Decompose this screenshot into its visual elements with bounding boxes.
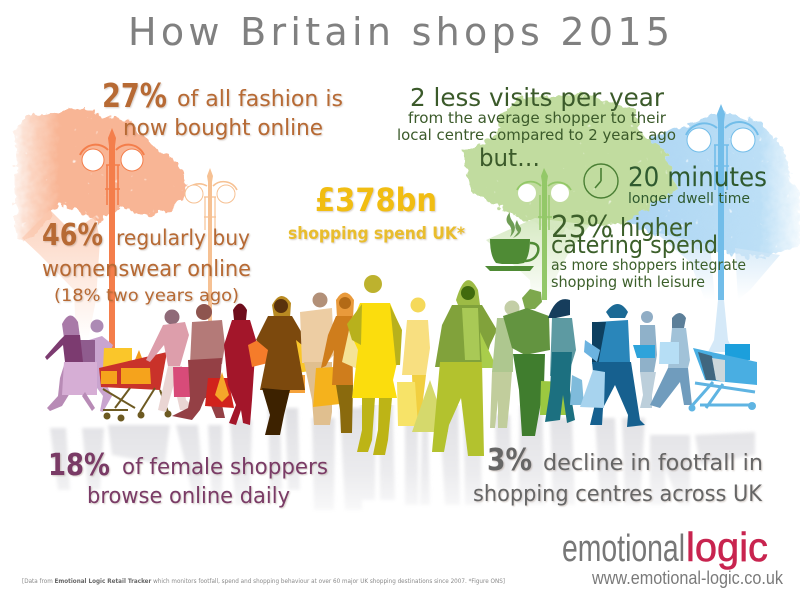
shopper: pale blue woman [633,311,657,408]
shopper: green man [503,289,550,436]
fashion stat: 27%: 27% [102,76,167,115]
logo: emotional logic: logic [686,524,768,570]
icon: clock [584,164,618,198]
total spend stat: £378bn: £378bn [315,181,437,219]
shopper: yellow woman [342,275,402,455]
footfall stat: 3% [473,443,763,507]
visits stat: 2 less visits per year [410,83,665,112]
total spend stat: £378bn: shopping spend UK* [288,224,465,244]
catering stat: 23% [551,210,746,291]
reflection of shoppers [50,405,756,506]
shopper: pale green person [490,300,520,428]
catering stat: 23%: higher [620,213,693,242]
logo: emotional logic: emotional [562,528,685,570]
fashion stat: 27% [102,76,343,141]
womenswear stat: 46%: (18% two years ago) [54,286,239,306]
womenswear stat: 46% [42,218,251,306]
catering stat: 23%: shopping with leisure [551,273,705,291]
shopper: shopping trolley red [99,348,172,422]
logo: emotional logic: www.emotional-logic.co.uk [591,568,784,588]
shopper: tan man [300,292,334,425]
catering stat: 23%: 23% [551,210,613,245]
visits stat: from the average shopper to their [408,109,667,127]
tree: green [463,93,677,305]
shopper: orange bag [313,367,340,407]
lamp post: pale orange [185,168,237,345]
shopper: blue person [580,304,645,427]
visits stat: local centre compared to 2 years ago [397,126,676,144]
shopper: mauve man [172,304,225,420]
lamp post: green [517,168,571,300]
dwell time stat: 20 minutes [628,162,767,193]
shopper: red bag [205,378,234,408]
womenswear stat: 46%: womenswear online [42,257,251,282]
catering stat: 23%: as more shoppers integrate [551,256,746,274]
tree: orange [15,107,188,340]
shoppers crowd [45,275,757,456]
footfall stat: 3%: shopping centres across UK [473,482,763,507]
dwell time stat: longer dwell time [628,191,750,207]
shopper: pink man [146,310,197,412]
online browsing stat: 18%: browse online daily [87,484,290,509]
shopper: blue trolley [688,344,757,412]
icon: coffee cup [485,212,538,271]
shopper: lime bag [540,381,568,415]
shopper: purple woman [45,315,97,411]
lamp post: blue [686,104,758,352]
footer note: [Data from Emotional Logic Retail Tracker which monitors footfall, spend and shopping behaviour at over 60 major UK shopping destinations since 2007. *Figure ONS] [22,577,505,585]
logo: emotional logic [562,524,784,588]
total spend stat: £378bn [288,181,465,244]
womenswear stat: 46%: regularly buy [116,226,250,250]
fashion stat: 27%: of all fashion is [177,87,343,112]
footfall stat: 3%: 3% [487,443,532,478]
dwell time stat [628,162,767,207]
online browsing stat: 18% [48,448,328,509]
shopper: woman with trolley [650,313,692,408]
fashion stat: 27%: now bought online [123,116,323,141]
shopper: brown woman [248,296,315,435]
title: How Britain shops 2015 [128,10,670,54]
shopper: lime green woman [412,280,497,456]
visits stat: but… [479,144,540,172]
lamp post: orange [80,128,144,360]
shopper: pale lilac woman [80,320,113,412]
catering stat: 23%: catering spend [551,231,718,259]
online browsing stat: 18%: 18% [48,448,110,483]
shopper: orange woman [321,292,354,433]
womenswear stat: 46%: 46% [42,218,103,253]
visits stat [397,83,676,172]
tree: blue [625,112,800,300]
online browsing stat: 18%: of female shoppers [122,455,328,480]
shopper: pale yellow woman [397,298,430,426]
shopper: red woman [215,304,256,425]
shopper: teal woman [545,299,584,423]
footfall stat: 3%: decline in footfall in [543,451,763,476]
